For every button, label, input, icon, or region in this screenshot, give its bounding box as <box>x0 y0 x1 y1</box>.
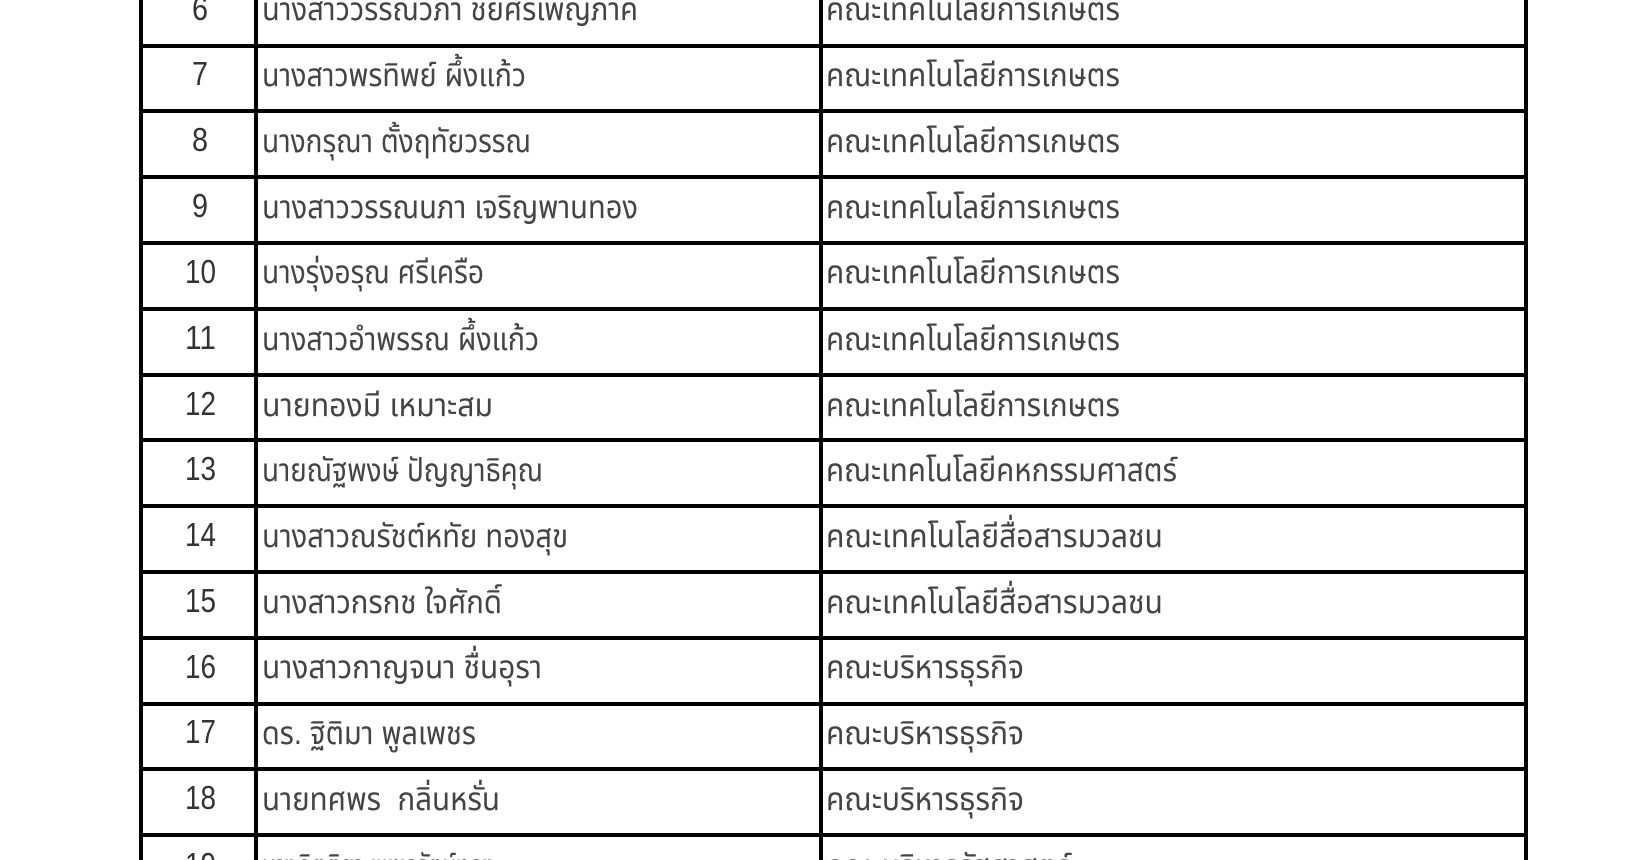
row 8 <box>192 121 1120 160</box>
row 7: 7 <box>192 55 208 92</box>
row 11 <box>185 317 1120 357</box>
row 14 <box>185 514 1163 555</box>
row 11: คณะเทคโนโลยีการเกษตร <box>826 321 1120 357</box>
row 8: นางกรุณา ตั้งฤทัยวรรณ <box>262 121 531 160</box>
row 13: 13 <box>185 450 216 487</box>
row 9: 9 <box>192 187 208 224</box>
row 18: คณะบริหารธุรกิจ <box>826 781 1024 818</box>
row 12: 12 <box>185 385 216 422</box>
row 14: คณะเทคโนโลยีสื่อสารมวลชน <box>826 514 1163 554</box>
row 9: คณะเทคโนโลยีการเกษตร <box>826 189 1120 225</box>
row 11: 11 <box>185 319 216 356</box>
row 17: ดร. ฐิติมา พูลเพชร <box>262 715 476 753</box>
row 16 <box>185 645 1024 686</box>
row 8: คณะเทคโนโลยีการเกษตร <box>826 123 1120 159</box>
row 6 <box>192 0 1120 27</box>
row 9 <box>192 187 1120 225</box>
row 18 <box>185 779 1024 818</box>
row 17 <box>185 713 1024 753</box>
row 17: 17 <box>185 713 216 750</box>
row 11: นางสาวอำพรรณ ผึ้งแก้ว <box>262 317 539 357</box>
row 12 <box>185 385 1120 423</box>
row 14: 14 <box>185 516 216 553</box>
row 10 <box>185 253 1120 291</box>
row 10: นางรุ่งอรุณ ศรีเครือ <box>262 254 484 291</box>
row 12: คณะเทคโนโลยีการเกษตร <box>826 387 1120 423</box>
row 15: นางสาวกรกช ใจศักดิ์ <box>262 584 502 620</box>
row 7 <box>192 53 1120 93</box>
row 7: คณะเทคโนโลยีการเกษตร <box>826 57 1120 93</box>
row 17: คณะบริหารธุรกิจ <box>826 715 1024 752</box>
row 14: นางสาวณรัชต์หทัย ทองสุข <box>262 518 568 555</box>
row 16: นางสาวกาญจนา ชื่นอุรา <box>262 645 542 686</box>
row 19 <box>185 846 1072 860</box>
row 13: คณะเทคโนโลยีคหกรรมศาสตร์ <box>826 452 1178 488</box>
row 10: คณะเทคโนโลยีการเกษตร <box>826 254 1120 290</box>
row 15: คณะเทคโนโลยีสื่อสารมวลชน <box>826 580 1163 620</box>
row 12: นายทองมี เหมาะสม <box>262 387 493 423</box>
row 9: นางสาววรรณนภา เจริญพานทอง <box>262 189 638 225</box>
row 18: นายทศพร กลิ่นหรั่น <box>262 779 500 817</box>
row 10: 10 <box>185 253 216 290</box>
row 7: นางสาวพรทิพย์ ผึ้งแก้ว <box>262 53 526 93</box>
row 18: 18 <box>185 779 216 816</box>
row 16: คณะบริหารธุรกิจ <box>826 649 1024 686</box>
row 13 <box>185 450 1178 489</box>
row 16: 16 <box>185 648 216 685</box>
row 8: 8 <box>192 121 208 158</box>
row 15 <box>185 580 1163 620</box>
row 13: นายณัฐพงษ์ ปัญญาธิคุณ <box>262 452 543 489</box>
row 15: 15 <box>185 582 216 619</box>
